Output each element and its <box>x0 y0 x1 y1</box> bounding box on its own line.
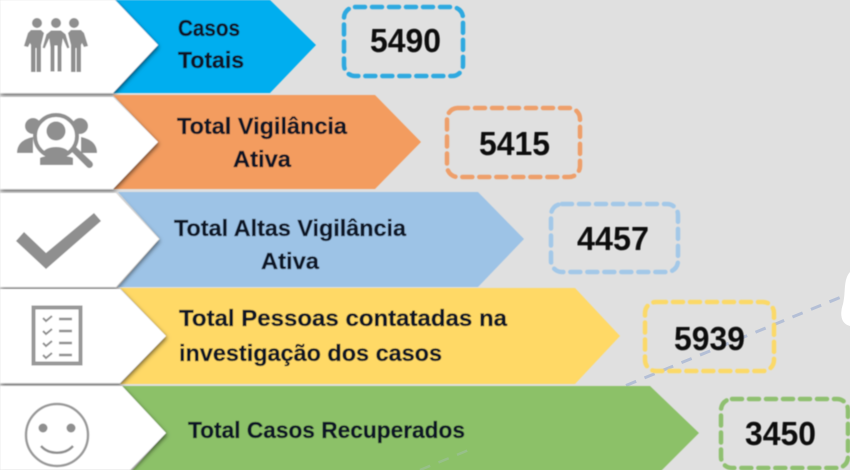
value box: 5939: 5939 <box>674 320 745 357</box>
arrow: casos totais <box>113 0 316 93</box>
heading: casos totais: Casos <box>178 15 240 41</box>
value box: 5490: 5490 <box>370 22 441 59</box>
heading: total altas vigilancia ativa: Ativa <box>261 248 319 274</box>
arrow: pessoas contatadas <box>120 288 620 384</box>
value box: 3450 <box>721 399 848 468</box>
heading: casos totais: Totais <box>178 47 244 73</box>
white tab: altas vigilancia ativa <box>0 193 159 287</box>
heading: total vigilancia ativa: Ativa <box>233 146 291 172</box>
value box: 3450: 3450 <box>745 415 816 452</box>
heading: total altas vigilancia ativa: Total Altas Vigilância <box>174 215 406 241</box>
heading: total casos recuperados: Total Casos Recuperados <box>188 417 465 443</box>
arrow: altas vigilancia ativa <box>118 192 524 287</box>
heading: total vigilancia ativa <box>177 113 347 172</box>
white tab: vigilancia ativa <box>0 97 158 189</box>
heading: total altas vigilancia ativa <box>174 215 406 274</box>
faint map line on green arrow <box>420 450 470 470</box>
map island fragment <box>841 272 850 326</box>
icon: checklist <box>34 308 80 364</box>
white tab: casos totais <box>0 0 158 93</box>
value box: 5415: 5415 <box>479 125 550 162</box>
value box: 5415 <box>447 108 580 177</box>
icon: check mark <box>16 213 101 269</box>
dashed map line <box>626 295 846 386</box>
heading: total pessoas contatadas: investigação dos casos <box>179 340 442 366</box>
icon: group of people <box>24 18 88 72</box>
value box: 5490 <box>344 7 463 76</box>
icon: smiley face <box>26 404 88 466</box>
value box: 4457: 4457 <box>577 220 649 257</box>
heading: casos totais <box>178 15 244 73</box>
panel: total vigilancia ativa <box>0 95 580 189</box>
heading: total pessoas contatadas: Total Pessoas contatadas na <box>179 305 507 331</box>
arrow: casos recuperados <box>122 386 699 470</box>
icon: magnifier over people <box>17 115 97 168</box>
panel: casos totais <box>0 0 463 93</box>
panel: total casos recuperados <box>0 386 848 470</box>
value box: 4457 <box>551 204 678 272</box>
heading: total vigilancia ativa: Total Vigilância <box>177 113 347 139</box>
value box: 5939 <box>645 302 774 371</box>
white tab: casos recuperados <box>0 386 166 470</box>
heading: total pessoas contatadas <box>179 305 507 366</box>
panel: total pessoas contatadas <box>0 288 774 384</box>
arrow: vigilancia ativa <box>113 95 421 189</box>
panel: total altas vigilancia ativa <box>0 192 678 287</box>
white tab: pessoas contatadas <box>0 289 166 383</box>
